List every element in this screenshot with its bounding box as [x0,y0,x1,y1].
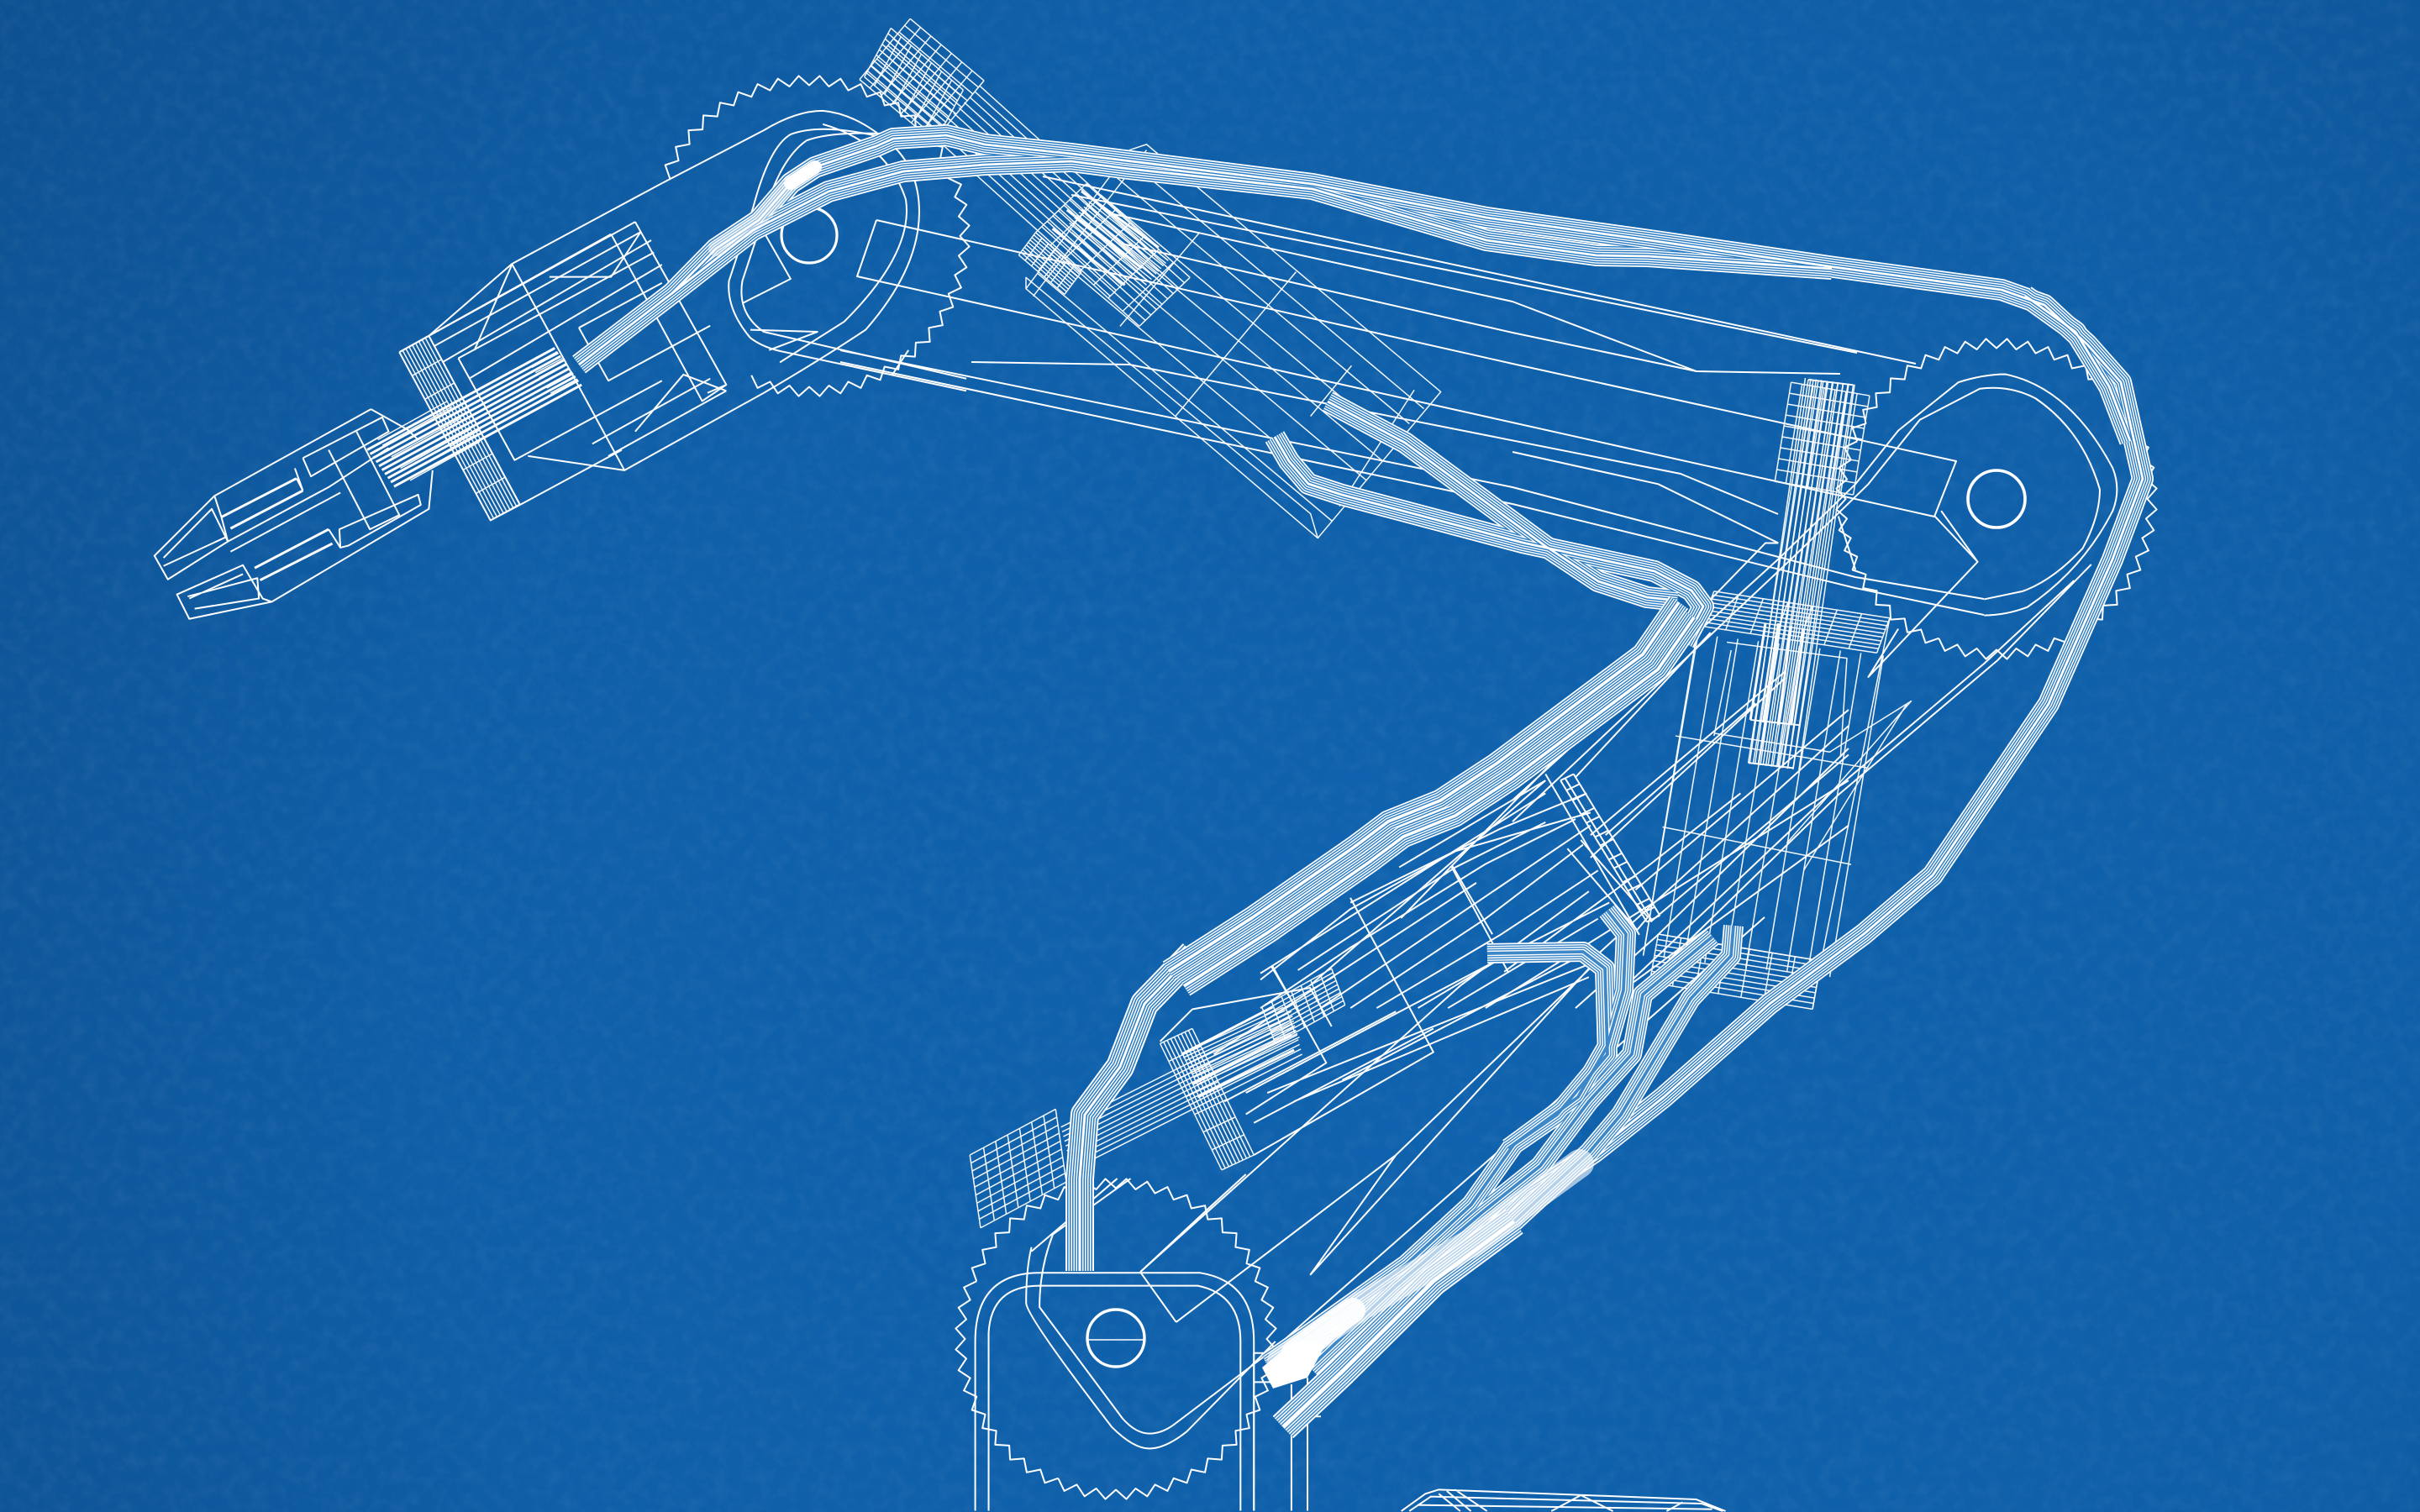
wrist pulley belt [662,111,966,393]
upper arm plate ribs [1260,633,1849,1008]
forearm long rods [840,176,1984,615]
bright cable clusters [716,167,1580,1389]
upper arm wireframe [1140,840,1765,1350]
elbow pulley belt [1401,375,2117,1008]
gripper fingers [155,409,433,619]
lower cable bundle [1267,911,1733,1427]
shoulder cylinder and screw [970,969,1345,1228]
wrist rod [367,348,581,486]
gears [666,76,2157,1499]
forearm cables [579,135,2143,1365]
base frame and triangular pulley [976,1174,1321,1510]
wrist cuff block [399,183,764,520]
forearm housing box [1026,144,1441,538]
pivot holes [781,207,2025,1367]
wrist clamp screw [860,18,1190,326]
elbow cylinder block [1644,378,1911,1009]
base machine housing [1402,1489,1726,1511]
upper arm cables [1080,602,1694,1271]
